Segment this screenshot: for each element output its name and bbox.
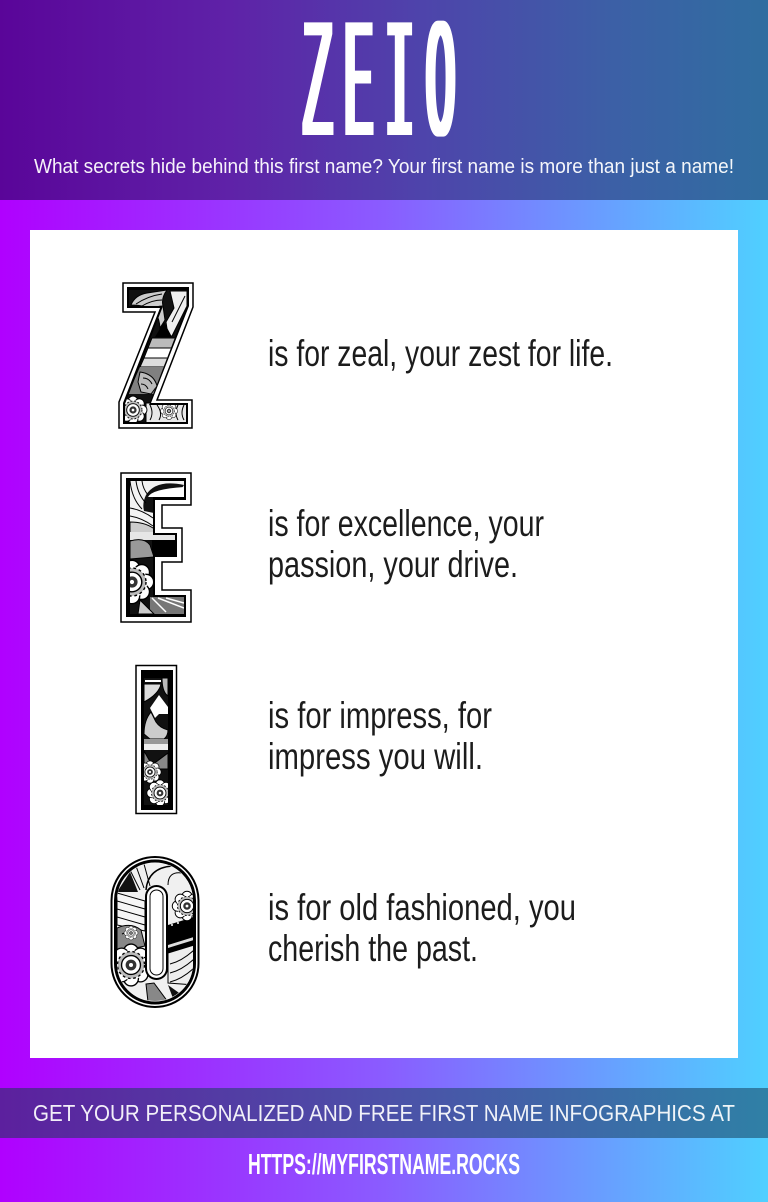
header band [0, 0, 768, 200]
footer call-to-action band [0, 1088, 768, 1138]
text: E meaning: passion, your drive. [268, 544, 518, 585]
text: Z meaning: is for zeal, your zest for life. [268, 333, 613, 374]
text: E meaning: is for excellence, your [268, 503, 544, 544]
text: I meaning: impress you will. [268, 736, 483, 777]
text: I meaning [268, 695, 492, 777]
white content panel [30, 230, 738, 1058]
text: O meaning: cherish the past. [268, 928, 478, 969]
text: E meaning [268, 503, 544, 585]
icon: decorative letter O [110, 857, 202, 1007]
subtitle: What secrets hide behind this first name? Your first name is more than just a name! [34, 156, 734, 178]
icon: decorative letter E [110, 473, 191, 622]
icon: decorative letter Z [119, 283, 193, 430]
footer url: HTTPS://MYFIRSTNAME.ROCKS [248, 1149, 520, 1181]
text: O meaning [268, 887, 576, 969]
icon: decorative letter I [136, 666, 176, 814]
text: O meaning: is for old fashioned, you [268, 887, 576, 928]
text: I meaning: is for impress, for [268, 695, 492, 736]
